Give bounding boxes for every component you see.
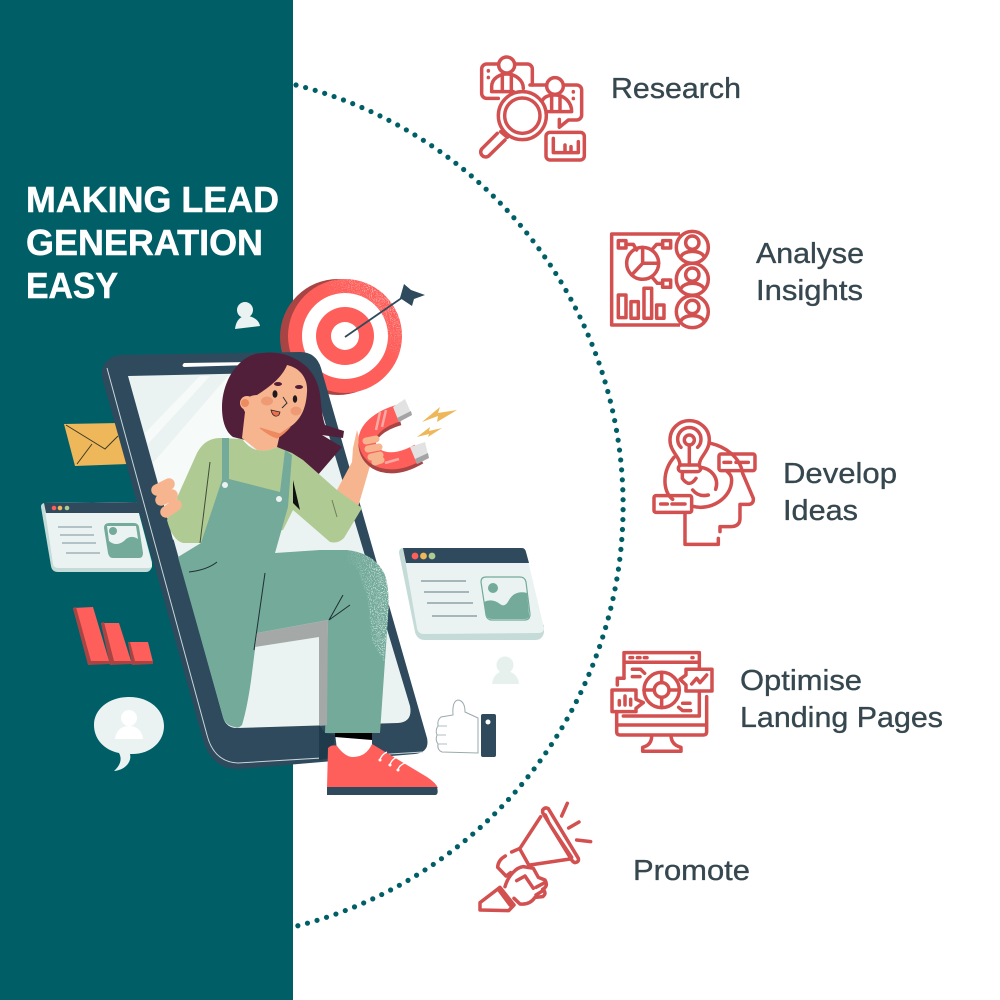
overalls and leg xyxy=(178,438,389,733)
label: optimise landing pages xyxy=(740,665,943,734)
icon: speech bubble with user xyxy=(94,697,164,771)
label: research: Research xyxy=(611,73,741,105)
hair back xyxy=(222,353,344,476)
title: GENERATION xyxy=(26,222,263,263)
title xyxy=(26,179,279,306)
right forearm xyxy=(337,430,372,507)
shirt xyxy=(167,438,362,543)
illustration: woman xyxy=(157,353,438,795)
label: develop ideas xyxy=(783,458,897,527)
label: analyse insights: Insights xyxy=(756,275,863,307)
label: analyse insights: Analyse xyxy=(756,238,864,270)
title: MAKING LEAD xyxy=(26,179,279,220)
label: develop ideas: Ideas xyxy=(783,495,858,527)
dotted arc xyxy=(296,85,623,926)
face details xyxy=(261,396,273,406)
icon: target with arrow xyxy=(280,279,425,395)
icon: analyse insights xyxy=(612,231,708,328)
icon: lightning bolts xyxy=(417,407,457,437)
left hand xyxy=(157,484,176,512)
icon: research xyxy=(481,57,584,160)
shoe xyxy=(327,744,438,788)
icon: magnet xyxy=(366,399,429,465)
window: left browser xyxy=(41,502,152,572)
icon: thumbs up xyxy=(436,700,496,757)
window: right browser xyxy=(399,548,544,640)
label: promote: Promote xyxy=(633,855,750,887)
icon: promote megaphone xyxy=(480,803,591,911)
chart: red bars xyxy=(73,607,153,665)
label: optimise landing pages: Optimise xyxy=(740,665,862,697)
icon: user lower xyxy=(492,656,519,684)
seat shadow xyxy=(255,620,328,725)
icon: optimise landing pages xyxy=(612,653,712,751)
phone xyxy=(102,352,428,769)
panel: teal left background xyxy=(0,0,293,1000)
label: optimise landing pages: Landing Pages xyxy=(740,702,943,734)
label: develop ideas: Develop xyxy=(783,458,897,490)
icon: develop ideas xyxy=(654,421,755,544)
icon: user top xyxy=(235,302,260,329)
icon: envelope xyxy=(64,423,128,466)
neck and face xyxy=(242,365,307,451)
title: EASY xyxy=(26,265,118,306)
label: analyse insights xyxy=(756,238,864,307)
sock xyxy=(335,733,372,758)
